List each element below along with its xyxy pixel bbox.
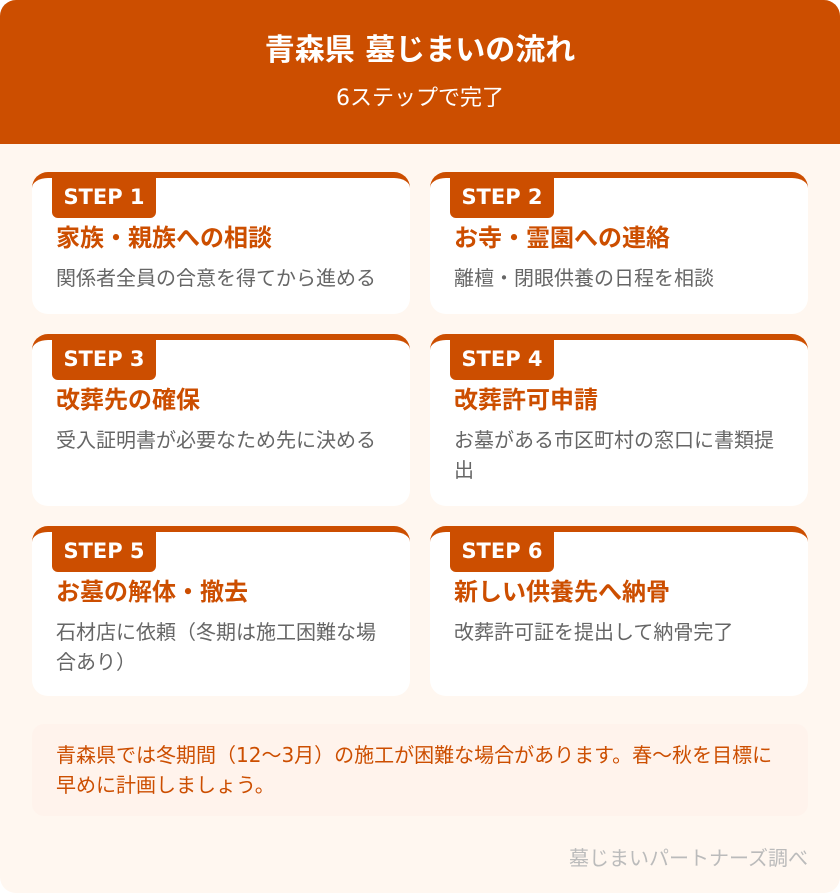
- step 6 heading: 新しい供養先へ納骨: [454, 578, 670, 606]
- panel: step 4: [430, 334, 808, 506]
- panel: step 3: [32, 334, 410, 506]
- step 5 heading: お墓の解体・撤去: [56, 578, 248, 606]
- header band: [0, 0, 840, 144]
- step 5 badge: STEP 5: [63, 539, 145, 563]
- callout: winter note: 青森県では冬期間（12〜3月）の施工が困難な場合があります。春〜秋を目標に早めに計画しましょう。: [56, 743, 772, 797]
- step 6 badge: STEP 6: [461, 539, 543, 563]
- step 1 badge: [52, 178, 156, 218]
- step 3 description: 受入証明書が必要なため先に決める: [56, 428, 376, 452]
- step 4 badge: STEP 4: [461, 347, 543, 371]
- callout: winter note: [32, 724, 808, 816]
- step 1 badge: STEP 1: [63, 185, 145, 209]
- panel: step 5: [32, 526, 410, 696]
- source credit: 墓じまいパートナーズ調べ: [569, 846, 808, 870]
- title: 青森県 墓じまいの流れ: [265, 33, 575, 68]
- step 2 badge: [450, 178, 554, 218]
- panel: step 2: [430, 172, 808, 314]
- step 1 heading: 家族・親族への相談: [56, 224, 272, 252]
- step 2 badge: STEP 2: [461, 185, 543, 209]
- step 3 badge: STEP 3: [63, 347, 145, 371]
- step 3 badge: [52, 340, 156, 380]
- step 4 badge: [450, 340, 554, 380]
- panel: step 6: [430, 526, 808, 696]
- step 2 description: 離檀・閉眼供養の日程を相談: [454, 266, 714, 290]
- step 6 badge: [450, 532, 554, 572]
- step 6 description: 改葬許可証を提出して納骨完了: [454, 620, 733, 644]
- panel: step 1: [32, 172, 410, 314]
- subtitle: 6ステップで完了: [336, 86, 504, 111]
- step 1 description: 関係者全員の合意を得てから進める: [56, 266, 376, 290]
- step 5 badge: [52, 532, 156, 572]
- step 2 heading: お寺・霊園への連絡: [454, 224, 670, 252]
- step 4 heading: 改葬許可申請: [454, 386, 598, 414]
- step 3 heading: 改葬先の確保: [56, 386, 200, 414]
- step 5 description: 石材店に依頼（冬期は施工困難な場合あり）: [56, 620, 376, 674]
- step 4 description: お墓がある市区町村の窓口に書類提出: [454, 428, 774, 482]
